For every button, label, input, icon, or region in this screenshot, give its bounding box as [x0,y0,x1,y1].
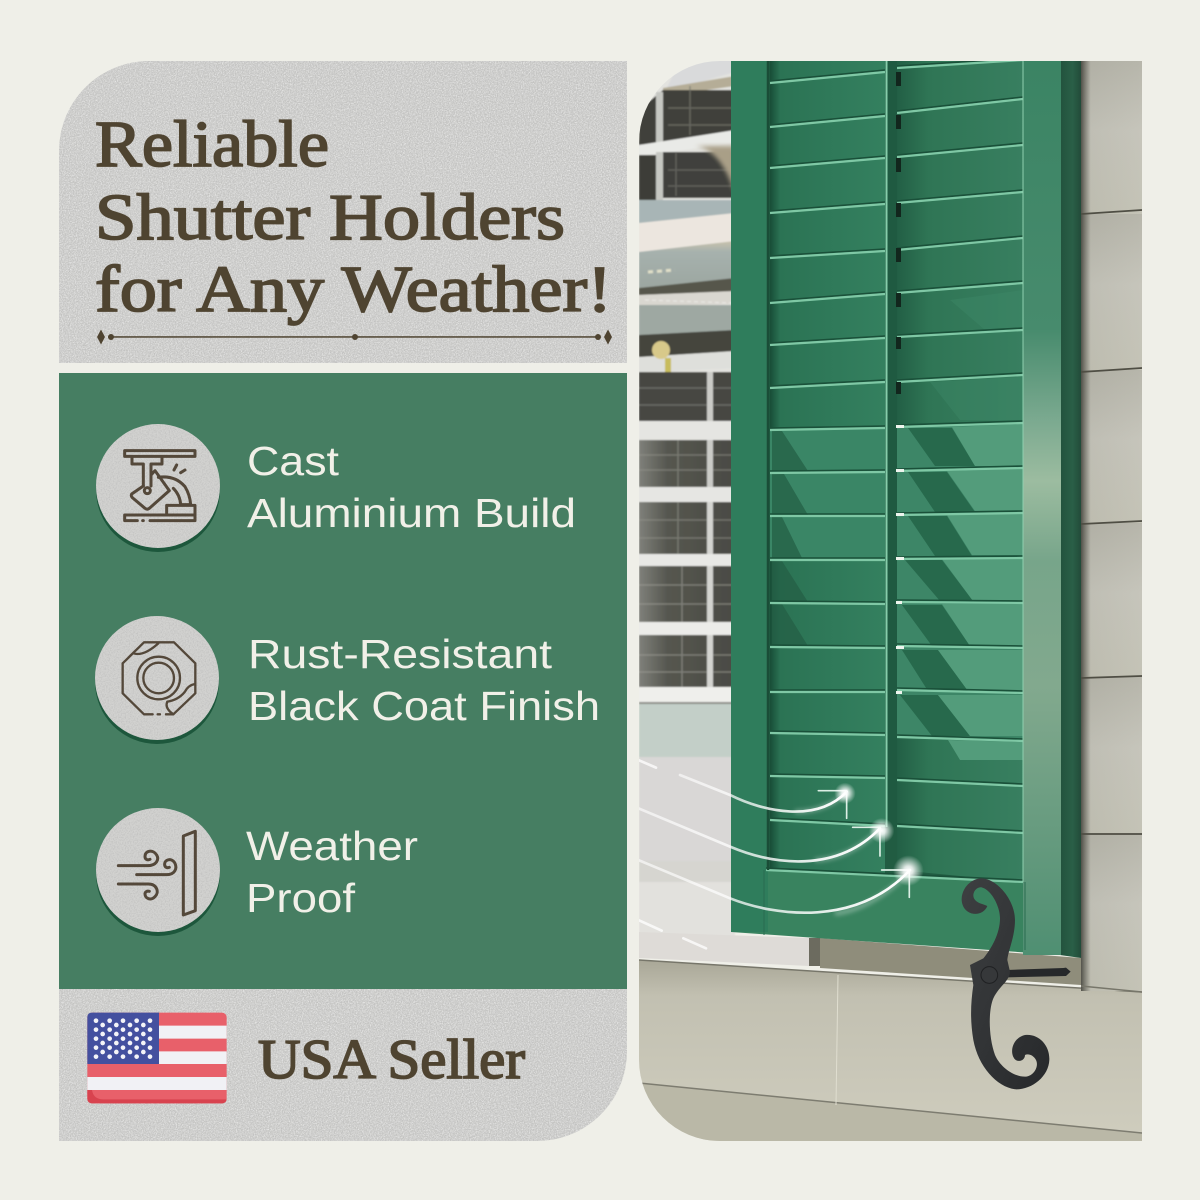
louver shadows [766,58,1023,880]
text: cast aluminium build [247,438,576,536]
siding right of shutter [1081,61,1142,836]
ornamental divider [97,330,612,344]
photo: green louvered shutter with holder [638,58,1142,1142]
text: rust-resistant: Rust-Resistant [248,631,553,677]
icon: cast aluminium [96,424,220,552]
siding below shutter [639,960,1142,1142]
icon: rust-resistant coat [95,616,219,744]
text: weather proof: Weather [246,823,418,869]
title: Shutter Holders [95,181,565,254]
text: cast aluminium build: Aluminium Build [247,490,576,536]
title: Reliable [95,108,329,181]
s-shaped shutter holder [962,878,1071,1089]
icon: usa flag [87,1013,227,1103]
panel: seller strip background [59,989,627,1141]
window behind shutter [639,60,739,938]
window sill [639,833,1142,992]
louvers left column [770,61,885,873]
panel: left feature column [59,61,627,1141]
text: rust-resistant: Black Coat Finish [248,683,600,729]
panel: heading background [59,61,627,363]
louvers right column [897,60,1023,882]
wind arrows [638,760,924,948]
text: rust-resistant [248,631,600,729]
text: cast aluminium build: Cast [247,438,340,484]
icon: weather proof [96,808,220,936]
text: usa seller: USA Seller [258,1029,525,1091]
shutter frame [731,61,1061,955]
panel: green features background [59,373,627,989]
centre tilt rod [885,61,904,827]
shutter side return [1060,61,1081,958]
text: weather proof [246,823,418,921]
title: for Any Weather! [95,253,612,326]
text: weather proof: Proof [246,875,356,921]
louver highlights [766,60,1023,882]
title [95,108,612,326]
